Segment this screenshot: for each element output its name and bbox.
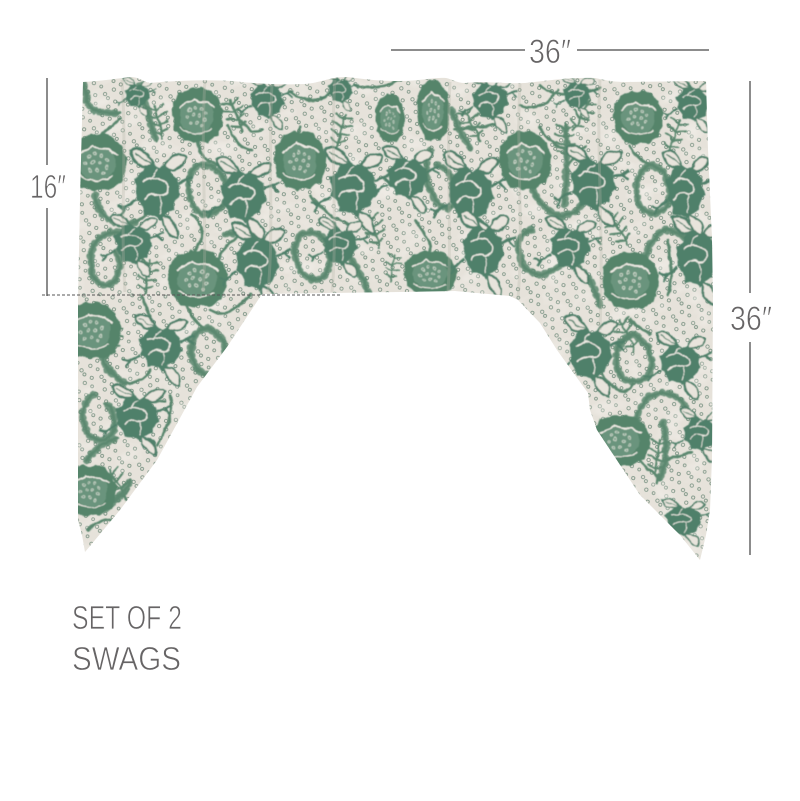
vines [83,75,693,530]
large rosette blooms [64,79,663,516]
cream mottling over dots [70,70,720,565]
dotted ground print [70,70,720,565]
dimension: 36 inch width: 36″ [529,33,571,71]
fabric base [70,70,720,565]
thorny sprigs [97,95,689,504]
caption: set of 2 swags: SWAGS [72,640,181,677]
dimension: 16 inch valance drop: 16″ [30,168,66,205]
panel: swag curtain [64,70,731,565]
caption: set of 2 swags: SET OF 2 [72,599,182,636]
caption: set of 2 swags [72,599,182,677]
floral print layer [64,72,731,545]
dimension: 36 inch length: 36″ [730,300,772,338]
leafy blooms [99,72,731,545]
pleat shading [122,80,601,330]
